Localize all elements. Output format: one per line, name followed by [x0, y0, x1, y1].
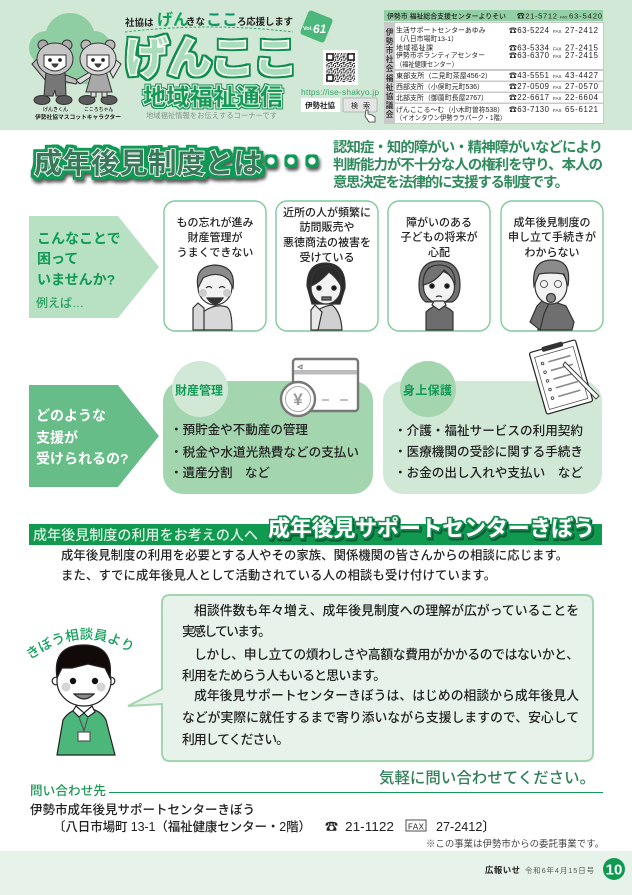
definition text — [333, 138, 603, 191]
office directory table: 63-5420 — [569, 12, 602, 21]
panel: personal care: ・介護・福祉サービスの利用契約 — [394, 424, 583, 438]
office names: 伊勢市ボランティアセンター — [396, 50, 485, 60]
vertical organisation name: 協 — [386, 91, 394, 101]
card: worried mother: 障がいのある — [406, 215, 472, 229]
speech bubble: 利用してください。 — [182, 732, 289, 747]
arrow: what support: 受けられるの? — [36, 450, 129, 466]
office directory table: 伊勢市 福祉総合支援センターよりそい — [387, 12, 506, 21]
phone numbers: ☎63-7130 — [509, 105, 550, 114]
panel: personal care — [383, 338, 602, 494]
icon: woman — [419, 261, 460, 330]
card: worried mother: 心配 — [428, 245, 450, 259]
tagline: げん — [157, 11, 189, 29]
footnote: ※この事業は伊勢市からの委託事業です。 — [426, 838, 604, 849]
vertical organisation name: 勢 — [386, 36, 394, 46]
phone numbers — [509, 26, 599, 114]
card: forgetful man: 財産管理が — [188, 230, 242, 244]
phone numbers: FAX — [553, 85, 562, 90]
contact details: FAX — [408, 822, 425, 832]
heading dots — [267, 157, 316, 165]
speech bubble: しかし、申し立ての煩わしさや高額な費用がかかるのではないかと、 — [194, 647, 579, 662]
panel: personal care: ・医療機関の受診に関する手続き — [394, 444, 583, 459]
phone numbers: 43-4427 — [565, 71, 598, 80]
arrow: what support — [29, 385, 159, 487]
icon: clipboard and pencil — [529, 338, 593, 414]
card: procedure unknown: 申し立て手続きが — [508, 230, 596, 244]
icon: bank card and coin: ¥ — [293, 390, 303, 409]
office names: 地域福祉課 — [396, 43, 433, 52]
phone numbers: 27-2412 — [565, 26, 598, 35]
phone numbers: ☎63-5224 — [509, 26, 550, 35]
search box: 伊勢社協 — [305, 100, 336, 110]
icon: man — [193, 265, 233, 330]
title logo: げんここ — [125, 35, 297, 83]
card: forgetful man — [164, 201, 266, 331]
office names: 西部支所（小俣町元町536） — [396, 82, 484, 91]
phone numbers: ☎63-5334 — [509, 44, 550, 52]
phone numbers: FAX — [553, 96, 562, 101]
intro text — [61, 548, 568, 582]
panel: personal care: 身上保護 — [403, 382, 452, 398]
office names: （イオンタウン伊勢ララパーク・1階） — [396, 113, 506, 122]
phone numbers: FAX — [553, 108, 562, 113]
arrow: troubles: 例えば… — [36, 296, 84, 310]
volume badge — [300, 10, 333, 43]
office names: （八日市場町13-1） — [396, 34, 458, 43]
arrow: what support: 支援が — [36, 430, 78, 446]
tagline: ろ応援します — [237, 16, 293, 28]
tagline — [125, 11, 293, 32]
office names: （福祉健康センター） — [396, 60, 458, 68]
phone numbers: 65-6121 — [565, 105, 598, 114]
office directory table: FAX — [560, 15, 568, 20]
panel: asset management: ・遺産分割 など — [170, 465, 270, 480]
office names — [396, 26, 506, 122]
publication info: 広報いせ — [485, 865, 520, 875]
section banner — [29, 516, 602, 545]
search box: 検 索 — [351, 101, 370, 110]
phone numbers: 27-0570 — [565, 82, 599, 91]
speech bubble: 実感しています。 — [182, 624, 271, 639]
vertical organisation name: 伊 — [386, 27, 394, 37]
speech bubble — [128, 595, 593, 761]
phone numbers: 27-2415 — [565, 51, 599, 60]
vertical organisation name: 会 — [386, 109, 394, 119]
contact details: 伊勢市成年後見サポートセンターきぼう — [30, 802, 255, 817]
vertical organisation name: 祉 — [386, 82, 394, 92]
phone numbers: ☎63-6370 — [509, 51, 550, 60]
panel: asset management: ・税金や水道光熱費などの支払い — [170, 444, 359, 460]
QR code — [323, 50, 358, 85]
vertical organisation name: 福 — [386, 73, 394, 83]
website URL: https://ise-shakyo.jp — [301, 87, 379, 97]
arrow: what support: どのような — [36, 408, 106, 424]
arrow: troubles: 困って — [37, 250, 78, 266]
card: door-to-door sales woman: 受けている — [300, 250, 354, 264]
section banner: 成年後見制度の利用をお考えの人へ — [33, 527, 258, 543]
contact details: 21-1122 — [345, 819, 394, 834]
mascot: girl — [76, 40, 121, 104]
arrow: troubles: こんなことで — [37, 230, 121, 246]
card: door-to-door sales woman: 悪徳商法の被害を — [283, 235, 371, 249]
phone numbers: 27-2415 — [565, 44, 599, 52]
contact details: 〔八日市場町 13-1（福祉健康センター・2階） — [53, 819, 311, 834]
vertical organisation name: 社 — [386, 54, 394, 64]
phone numbers: ☎27-0509 — [509, 82, 549, 91]
phone numbers: FAX — [553, 74, 562, 79]
phone numbers: ☎22-6617 — [509, 93, 549, 102]
card: door-to-door sales woman: 訪問販売や — [300, 220, 354, 234]
phone numbers: 22-6604 — [565, 93, 599, 102]
card: procedure unknown — [501, 201, 603, 331]
office names: 東部支所（二見町茶屋456-2） — [396, 71, 492, 80]
arrow: troubles — [29, 216, 159, 318]
publication info: 令和6年4月15日号 — [525, 866, 595, 875]
office directory table — [384, 10, 604, 124]
publication info — [485, 865, 595, 875]
mascot illustration — [29, 13, 121, 113]
speech bubble: 相談件数も年々増え、成年後見制度への理解が広がっていることを — [194, 603, 579, 618]
icon: bank card and coin — [281, 359, 358, 416]
phone numbers: FAX — [553, 46, 562, 52]
header caption: 地域福祉情報をお伝えするコーナーです — [146, 111, 277, 120]
definition text: 認知症・知的障がい・精神障がいなどにより — [333, 138, 603, 156]
panel: asset management — [163, 359, 373, 494]
header band — [0, 0, 632, 130]
volume badge: 61 — [313, 22, 327, 36]
speech bubble: 成年後見サポートセンターきぼうは、はじめの相談から成年後見人 — [194, 688, 579, 703]
office names: げんここる～む（小木町曽祢538） — [396, 105, 504, 114]
vertical organisation name: 議 — [386, 100, 394, 110]
speech bubble: 利用をためらう人もいると思います。 — [182, 668, 386, 683]
card: worried mother: 子どもの将来が — [400, 230, 478, 244]
phone numbers: FAX — [553, 29, 562, 34]
subtitle logo: 地域福祉通信 — [143, 84, 283, 110]
office names: 生活サポートセンターあゆみ — [396, 26, 486, 34]
call to action: 気軽に問い合わせてください。 — [379, 769, 595, 787]
definition text: 判断能力が不十分な人の権利を守り、本人の — [333, 156, 603, 174]
icon: tree blob — [29, 13, 111, 84]
card: forgetful man: うまくできない — [177, 246, 253, 259]
contact details — [30, 802, 495, 834]
vertical organisation name — [386, 27, 394, 119]
contact details: ☎ — [325, 819, 338, 834]
tagline: ここ — [206, 12, 238, 29]
vertical organisation name: 会 — [386, 63, 394, 73]
banner title: 成年後見サポートセンターきぼう — [268, 516, 595, 541]
mascot names: げんきくん — [43, 106, 68, 113]
definition text: 意思決定を法律的に支援する制度です。 — [333, 173, 569, 191]
mascot: boy — [32, 40, 78, 104]
footer band — [0, 851, 632, 895]
card: door-to-door sales woman — [276, 201, 378, 331]
card: forgetful man: もの忘れが進み — [176, 215, 254, 229]
card: worried mother — [388, 201, 490, 331]
mascot caption: 伊勢社協マスコットキャラクター — [35, 113, 121, 121]
panel: personal care: ・お金の出し入れや支払い など — [394, 465, 583, 480]
contact heading: 問い合わせ先 — [30, 784, 106, 798]
phone numbers: ☎43-5551 — [509, 71, 549, 80]
icon: worried woman — [307, 263, 345, 330]
panel: asset management: 財産管理 — [175, 382, 223, 398]
volume badge: Vol. — [303, 26, 313, 32]
arc label: きぼう相談員より — [26, 627, 132, 658]
office directory table: ☎21-5712 — [517, 12, 557, 21]
card: door-to-door sales woman: 近所の人が頻繁に — [283, 205, 371, 219]
contact details: 27-2412〕 — [436, 819, 495, 834]
intro text: また、すでに成年後見人として活動されている人の相談も受け付けています。 — [61, 568, 496, 582]
arrow: troubles: いませんか? — [37, 272, 115, 288]
icon: older man — [530, 260, 574, 330]
tagline: 社協は — [125, 17, 154, 29]
office names: 北部支所（御薗町長屋2767） — [396, 93, 488, 102]
phone numbers: FAX — [553, 54, 562, 59]
page number: 10 — [606, 862, 622, 878]
icon: hand cursor — [365, 110, 375, 122]
tagline: きな — [186, 17, 206, 28]
search box — [301, 98, 377, 122]
vertical organisation name: 市 — [386, 45, 394, 55]
page number — [603, 858, 625, 880]
mascot name: kokoro: こころちゃん — [84, 107, 113, 113]
speech bubble: などが実際に就任するまで寄り添いながら支援しますので、安心して — [182, 710, 579, 725]
intro text: 成年後見制度の利用を必要とする人やその家族、関係機関の皆さんからの相談に応じます。 — [61, 548, 568, 562]
heading: what is guardianship: 成年後見制度とは — [34, 148, 262, 180]
panel: asset management: ・預貯金や不動産の管理 — [170, 422, 308, 437]
icon: counsellor — [52, 645, 115, 755]
card: procedure unknown: 成年後見制度の — [514, 215, 590, 229]
card: procedure unknown: わからない — [524, 246, 580, 259]
